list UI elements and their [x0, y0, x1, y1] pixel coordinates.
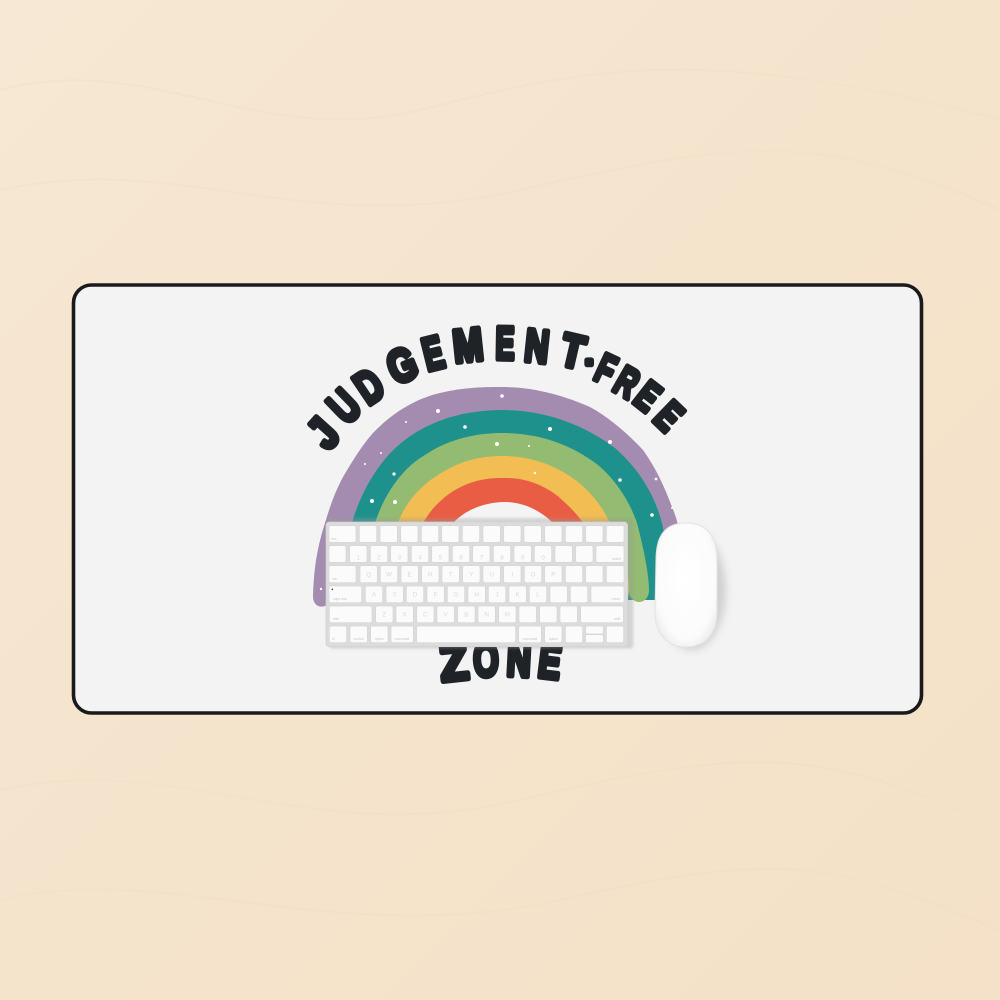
key row 6: modifiers and space bar: fn — [332, 637, 335, 641]
heading: JUDGEMENT-FREE arched lettering: T — [556, 324, 590, 379]
key row 4: ASDF: H — [474, 591, 479, 598]
key row 5: ZXCV: M — [505, 611, 510, 618]
key row 6: modifiers and space bar: command — [395, 637, 409, 641]
heading: JUDGEMENT-FREE arched lettering: · — [585, 346, 595, 379]
heading: ZONE: O — [472, 632, 500, 687]
key row 2: numbers: 0 — [541, 554, 545, 561]
key row 2: numbers: 9 — [521, 554, 525, 561]
heading: JUDGEMENT-FREE arched lettering: U — [319, 380, 371, 433]
rainbow band: yellow — [392, 456, 629, 600]
key row 4: ASDF: return — [612, 597, 620, 601]
key row 3: QWERTY: E — [408, 571, 412, 578]
key row 4: ASDF: J — [495, 591, 499, 598]
key row 3: QWERTY: R — [428, 571, 433, 578]
rainbow band: red — [420, 478, 590, 600]
key row 3: QWERTY: Y — [469, 571, 474, 578]
key row 5: ZXCV: V — [444, 611, 449, 618]
key row 3: QWERTY: tab — [332, 577, 337, 581]
key row 4: ASDF: G — [454, 591, 459, 598]
rainbow band: teal — [345, 410, 668, 600]
key row 5: ZXCV: shift — [333, 617, 339, 621]
heading: JUDGEMENT-FREE arched lettering — [297, 318, 692, 458]
keyboard — [326, 518, 633, 649]
key row 3: QWERTY — [329, 566, 624, 583]
key row 5: ZXCV: shift — [614, 617, 620, 621]
heading: JUDGEMENT-FREE arched lettering: E — [417, 327, 449, 381]
key row 2: numbers: 5 — [439, 554, 443, 561]
key row 3: QWERTY: P — [551, 571, 555, 578]
heading: ZONE: N — [505, 631, 533, 687]
key row 2: numbers: 3 — [398, 554, 402, 561]
key row 1: function keys: esc — [331, 537, 337, 541]
heading: JUDGEMENT-FREE arched lettering: E — [645, 392, 692, 440]
key row 5: ZXCV: C — [423, 611, 428, 618]
key row 5: ZXCV: N — [484, 611, 489, 618]
heading: ZONE: Z — [437, 635, 471, 693]
rainbow inner gap — [450, 502, 560, 600]
key row 3: QWERTY: O — [531, 571, 536, 578]
panel: desk mat — [74, 285, 922, 713]
heading: JUDGEMENT-FREE arched lettering: E — [495, 318, 515, 370]
key row 4: ASDF: K — [516, 591, 521, 598]
key row 3: QWERTY: T — [449, 571, 453, 578]
key row 4: ASDF: S — [393, 591, 397, 598]
key row 1: function keys — [329, 526, 624, 542]
rainbow — [313, 387, 684, 607]
heading: JUDGEMENT-FREE arched lettering: G — [380, 336, 425, 394]
key row 2: numbers: 8 — [500, 554, 504, 561]
heading: ZONE: E — [536, 633, 564, 690]
key row 4: ASDF — [329, 586, 624, 603]
rainbow band: purple — [313, 387, 684, 607]
key row 5: ZXCV: X — [403, 611, 408, 618]
heading: JUDGEMENT-FREE arched lettering: R — [606, 357, 647, 408]
key row 3: QWERTY: I — [511, 571, 513, 578]
mouse — [655, 523, 726, 650]
key row 2: numbers: 7 — [480, 554, 484, 561]
key row 4: ASDF: A — [372, 591, 377, 598]
key row 2: numbers — [329, 546, 624, 562]
heading: ZONE — [437, 631, 564, 693]
key row 6: modifiers and space bar: control — [354, 637, 364, 641]
key row 5: ZXCV: B — [464, 611, 468, 618]
key row 6: modifiers and space bar: command — [523, 637, 537, 641]
heading: JUDGEMENT-FREE arched lettering: E — [626, 371, 670, 421]
key row 2: numbers: delete — [612, 557, 621, 561]
key row 2: numbers: 4 — [418, 554, 422, 561]
rainbow band: green — [370, 433, 649, 602]
heading: JUDGEMENT-FREE arched lettering: J — [297, 408, 349, 458]
key row 3: QWERTY: U — [489, 571, 494, 578]
heading: JUDGEMENT-FREE arched lettering: M — [450, 318, 486, 372]
key row 2: numbers: 1 — [357, 554, 361, 561]
key row 5: ZXCV — [329, 606, 623, 623]
key row 4: ASDF: caps lock — [333, 597, 347, 601]
key row 4: ASDF: L — [536, 591, 540, 598]
key row 6: modifiers and space bar: option — [549, 637, 558, 641]
heading: JUDGEMENT-FREE arched lettering: F — [588, 345, 624, 394]
key row 6: modifiers and space bar — [329, 626, 624, 643]
key row 2: numbers: 2 — [377, 554, 381, 561]
rainbow sparkles — [320, 394, 673, 590]
key row 3: QWERTY: Q — [366, 571, 371, 578]
key row 4: ASDF: D — [413, 591, 418, 598]
heading: JUDGEMENT-FREE arched lettering: D — [346, 359, 394, 415]
heading: JUDGEMENT-FREE arched lettering: N — [522, 321, 551, 373]
key row 4: ASDF: F — [434, 591, 438, 598]
key row 3: QWERTY: W — [386, 571, 392, 578]
key row 2: numbers: 6 — [459, 554, 463, 561]
key row 5: ZXCV: Z — [382, 611, 386, 618]
key row 6: modifiers and space bar: option — [375, 637, 384, 641]
